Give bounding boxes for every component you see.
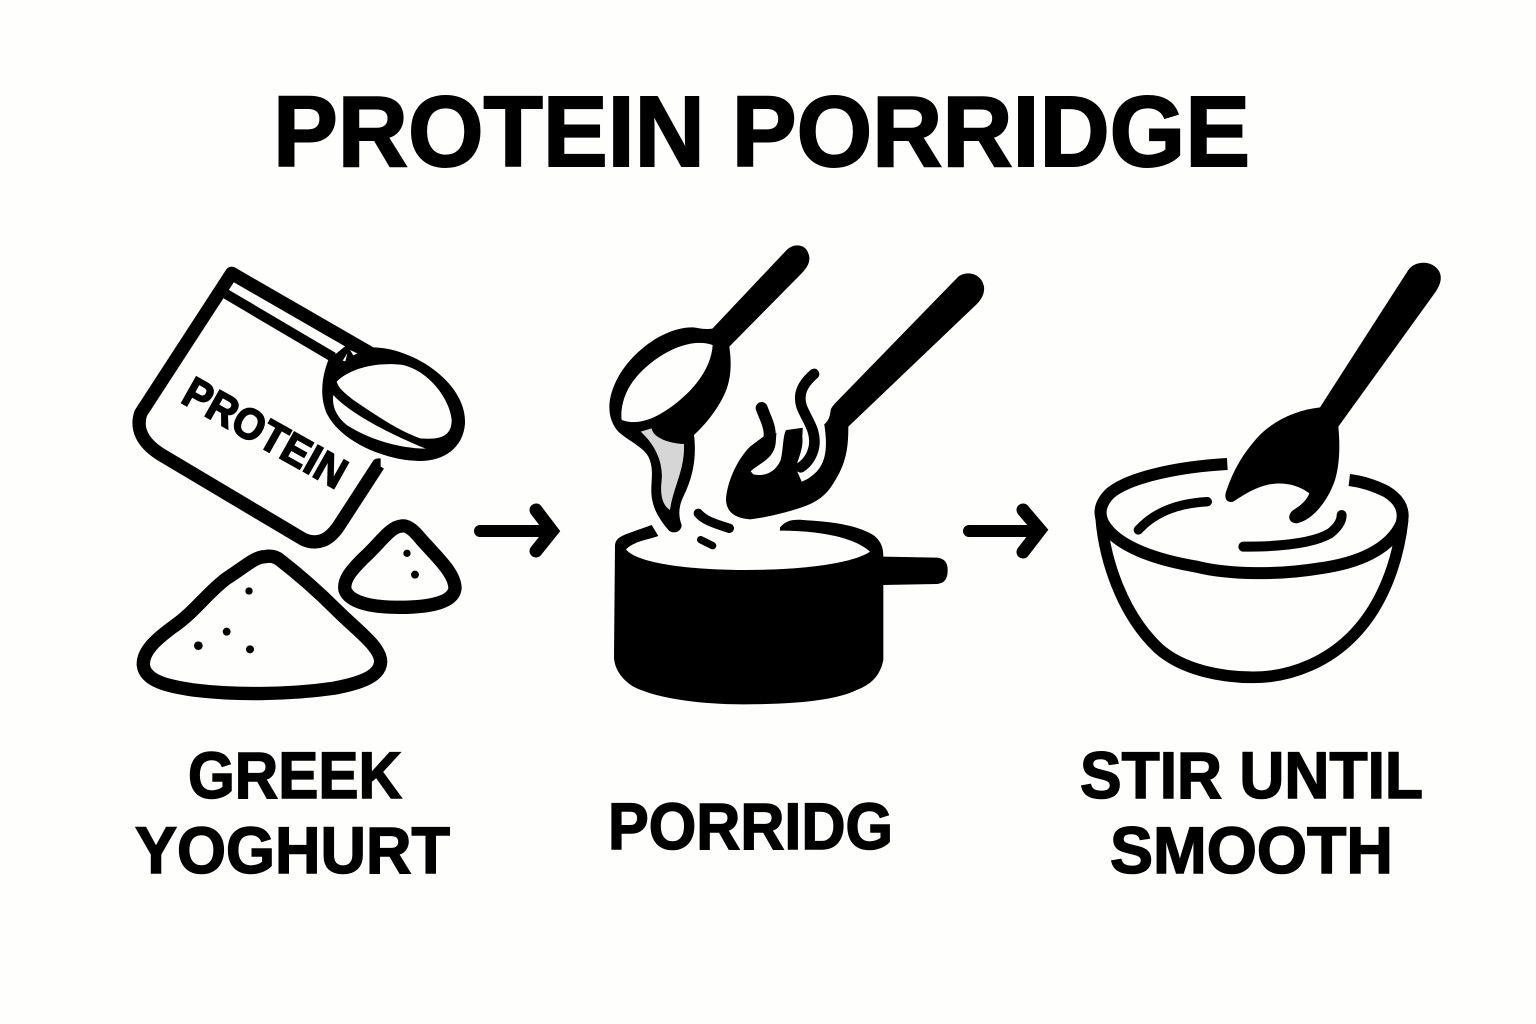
large powder pile (143, 556, 381, 694)
jar label: PROTEIN (174, 369, 355, 498)
label: step 1: YOGHURT (135, 813, 450, 887)
label: step 2: PORRIDG (608, 789, 893, 863)
ladle (609, 245, 809, 532)
stirring spoon (1225, 263, 1441, 523)
label: step 1: GREEK (188, 738, 402, 812)
jar band (226, 294, 333, 357)
small powder pile (345, 526, 455, 607)
swirl marks (1138, 502, 1342, 547)
label: step 3: SMOOTH (1110, 813, 1393, 887)
scoop (322, 345, 465, 461)
label: step 3 (1080, 738, 1423, 887)
icon: protein jar, scoop and powder piles (139, 273, 465, 694)
pot (614, 520, 948, 704)
icon: pot with ladle and spoon (609, 245, 984, 704)
label: step 1 (135, 738, 450, 887)
label: step 3: STIR UNTIL (1080, 738, 1423, 812)
spoon with steam (726, 273, 984, 519)
jar outline (139, 273, 381, 542)
bowl body (1101, 520, 1403, 677)
icon: bowl with spoon (1101, 263, 1441, 677)
title: PROTEIN PORRIDGE (273, 76, 1250, 188)
bowl rim (1101, 464, 1403, 573)
arrow: step 1 to step 2 (480, 510, 552, 551)
arrow: step 2 to step 3 (969, 510, 1040, 552)
splash marks (698, 513, 729, 546)
